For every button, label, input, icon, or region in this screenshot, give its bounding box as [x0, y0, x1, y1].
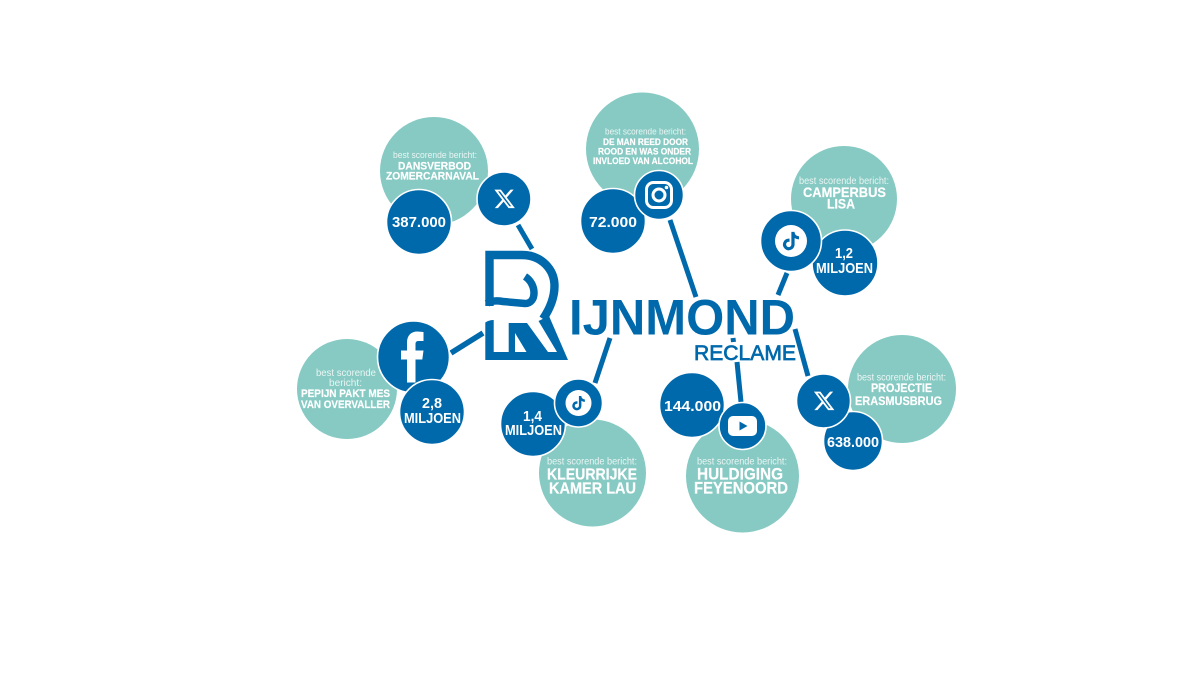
stat: 387.000: 387.000: [392, 214, 446, 231]
icon: Facebook: [378, 321, 450, 393]
post text: KLEURRIJKE: [547, 466, 637, 484]
post text: best scorende bericht:: [857, 372, 946, 384]
icon: YouTube: [719, 402, 766, 450]
post text: LISA: [827, 196, 855, 212]
post text: ZOMERCARNAVAL: [386, 170, 479, 182]
post text: HULDIGING: [697, 466, 783, 484]
panel: TikTok 1,4 miljoen: [500, 379, 646, 526]
stat: 1,4 miljoen: 1,4: [523, 408, 543, 425]
connector lines: [451, 220, 808, 402]
stat: 72.000: 72.000: [589, 214, 637, 231]
icon: X: [477, 172, 531, 226]
stat: 638.000: [824, 412, 882, 470]
post text: best scorende bericht:: [605, 126, 686, 138]
stat: 2,8 miljoen: 2,8: [422, 395, 442, 412]
stat: 638.000: 638.000: [827, 435, 879, 451]
bubble: best scoring post: [539, 420, 646, 526]
post text: [301, 368, 390, 411]
post text: [855, 372, 946, 408]
post text: [694, 456, 788, 498]
post text: DE MAN REED DOOR: [603, 137, 688, 148]
stat: 2,8 miljoen: MILJOEN: [404, 410, 461, 427]
post text: DANSVERBOD: [398, 160, 471, 172]
bubble: best scoring post: [586, 92, 699, 206]
stat: 1,2 miljoen: MILJOEN: [816, 260, 873, 277]
stat: 144.000: 144.000: [664, 398, 721, 415]
post text: [547, 456, 637, 498]
bubble: best scoring post: [686, 420, 799, 532]
panel: Facebook 2,8 miljoen: [297, 321, 464, 444]
bubble: best scoring post: [848, 335, 956, 443]
logo wordmark: IJNMOND: [569, 290, 795, 346]
stat: 144.000: [660, 372, 724, 438]
icon: Instagram: [634, 170, 684, 220]
icon: TikTok: [554, 379, 602, 427]
post text: [593, 126, 693, 167]
post text: CAMPERBUS: [803, 184, 886, 200]
post text: ERASMUSBRUG: [855, 394, 942, 408]
logo mark: R: [485, 255, 568, 360]
post text: FEYENOORD: [694, 480, 788, 498]
post text: best scorende: [316, 368, 376, 379]
stat: 1,2 miljoen: [812, 230, 878, 296]
post text: PEPIJN PAKT MES: [301, 388, 390, 400]
post text: ROOD EN WAS ONDER: [598, 146, 691, 158]
stat: 2,8 miljoen: [400, 380, 464, 444]
stat: 387.000: [386, 190, 452, 254]
stat: 1,4 miljoen: [500, 392, 566, 456]
panel: TikTok 1,2 miljoen: [760, 146, 897, 296]
stat: 1,4 miljoen: MILJOEN: [505, 422, 562, 439]
post text: best scorende bericht:: [547, 456, 637, 468]
bubble: best scoring post: [297, 339, 397, 439]
post text: KAMER LAU: [549, 480, 636, 498]
bubble: best scoring post: [791, 146, 897, 252]
panel: Instagram 72.000: [580, 92, 699, 254]
post text: best scorende bericht:: [799, 176, 889, 187]
post text: best scorende bericht:: [697, 456, 787, 468]
panel: YouTube 144.000: [660, 372, 799, 532]
post text: bericht:: [329, 378, 362, 389]
post text: PROJECTIE: [871, 381, 932, 395]
post text: INVLOED VAN ALCOHOL: [593, 156, 693, 167]
panel: X 638.000: [796, 335, 956, 470]
panel: X 387.000: [380, 117, 531, 254]
post text: [386, 150, 479, 182]
stat: 72.000: [580, 188, 646, 254]
post text: [799, 176, 889, 212]
bubble: best scoring post: [380, 117, 488, 225]
logo: Rijnmond Reclame: [485, 255, 796, 365]
logo subline: RECLAME: [694, 342, 796, 365]
post text: VAN OVERVALLER: [301, 399, 390, 411]
stat: 1,2 miljoen: 1,2: [835, 245, 853, 262]
icon: TikTok: [760, 210, 822, 272]
post text: best scorende bericht:: [393, 150, 477, 161]
icon: X: [796, 374, 850, 428]
